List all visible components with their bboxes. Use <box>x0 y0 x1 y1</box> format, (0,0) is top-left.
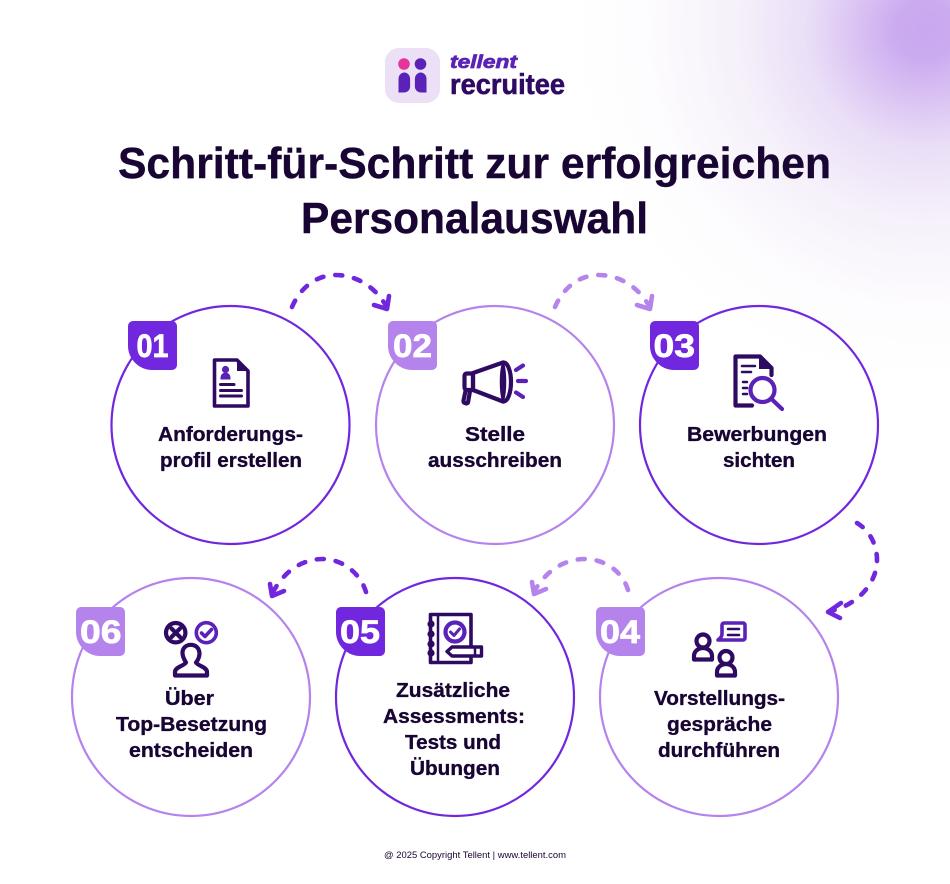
badge 03: 03 <box>654 328 695 364</box>
label: Bewerbungen <box>687 423 827 446</box>
label: Anforderungs- <box>158 423 303 446</box>
circle outline <box>112 306 350 544</box>
label: profil erstellen <box>160 449 302 472</box>
panel: step 01 <box>112 306 350 544</box>
badge 05 <box>336 607 385 656</box>
arrow: step 04 to 05 <box>532 559 628 594</box>
label: entscheiden <box>129 739 253 762</box>
label: Stelle <box>465 423 525 446</box>
panel: step 05 <box>336 578 574 816</box>
badge 05: 05 <box>340 614 380 650</box>
label: ausschreiben <box>428 449 562 472</box>
arrow: step 05 to 06 <box>270 559 366 596</box>
badge 03 <box>650 321 699 370</box>
label: Über <box>165 687 214 710</box>
label: gespräche <box>667 713 772 736</box>
label <box>158 423 303 472</box>
label: sichten <box>723 449 795 472</box>
label <box>116 687 267 762</box>
icon: two people talking <box>694 623 745 676</box>
label: Vorstellungs- <box>654 687 785 710</box>
badge 01 <box>128 321 177 370</box>
badge 04: 04 <box>600 614 640 650</box>
logo mark <box>385 48 440 103</box>
label: Tests und <box>405 731 501 754</box>
badge 02: 02 <box>393 328 432 364</box>
icon: reject or accept person <box>166 623 216 676</box>
title: Personalauswahl <box>301 194 648 243</box>
panel: step 06 <box>72 578 310 816</box>
circle outline <box>336 578 574 816</box>
label: durchführen <box>658 739 780 762</box>
label: Zusätzliche <box>396 679 510 702</box>
panel: step 02 <box>376 306 614 544</box>
badge 01: 01 <box>136 328 168 364</box>
icon: document with magnifier <box>736 356 782 409</box>
circle outline <box>600 578 838 816</box>
icon: megaphone <box>463 362 526 403</box>
label <box>654 687 785 762</box>
label: Übungen <box>410 757 500 780</box>
label <box>687 423 827 472</box>
circle outline <box>376 306 614 544</box>
logo wordmark: tellent: tellent <box>450 52 518 72</box>
panel: step 03 <box>640 306 878 544</box>
footer copyright: @ 2025 Copyright Tellent | www.tellent.com <box>384 850 566 861</box>
logo <box>385 48 565 103</box>
label: Top-Besetzung <box>116 713 267 736</box>
icon: document with profile <box>214 360 248 406</box>
badge 06 <box>76 607 125 656</box>
label: Assessments: <box>383 705 525 728</box>
circle outline <box>640 306 878 544</box>
label <box>428 423 562 472</box>
icon: notebook with pencil <box>427 614 482 662</box>
badge 02 <box>388 321 437 370</box>
title <box>118 139 831 243</box>
arrow: step 01 to 02 <box>292 275 389 309</box>
label <box>383 679 525 780</box>
badge 04 <box>596 607 645 656</box>
circle outline <box>72 578 310 816</box>
arrow: step 03 to 04 <box>828 523 877 618</box>
title: Schritt-für-Schritt zur erfolgreichen <box>118 139 831 188</box>
logo wordmark: recruitee: recruitee <box>450 69 565 101</box>
arrow: step 02 to 03 <box>555 275 652 309</box>
badge 06: 06 <box>80 614 122 650</box>
panel: step 04 <box>596 578 838 816</box>
